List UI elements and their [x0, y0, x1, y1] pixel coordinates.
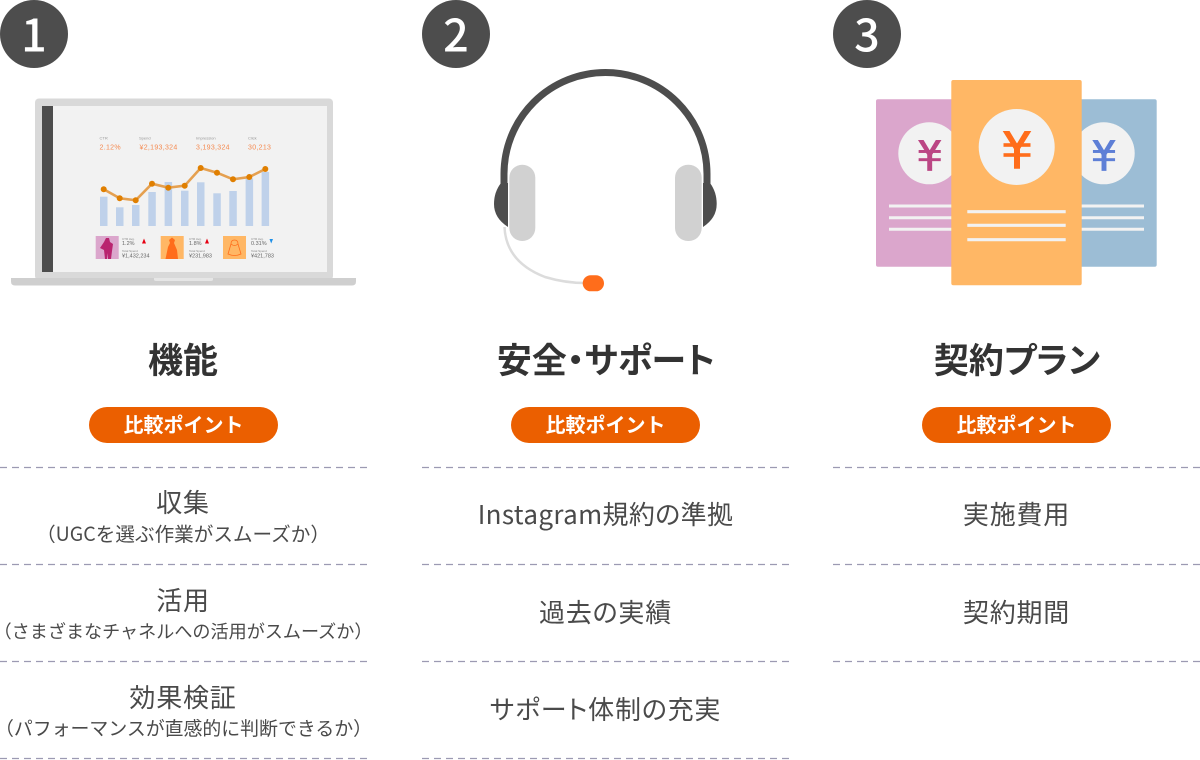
- KPI labels: CTR: [100, 136, 108, 140]
- document: blue: [1070, 99, 1157, 267]
- criteria list: [833, 468, 1200, 662]
- KPI labels: 2.12%: [100, 144, 121, 152]
- product card 2: ¥231,983: [189, 254, 212, 260]
- KPI labels: 30,213: [248, 144, 271, 152]
- pill: 比較ポイント: [922, 407, 1111, 443]
- pill: 比較ポイント: 比較ポイント: [546, 414, 666, 437]
- number badge 3: [833, 0, 901, 68]
- number badge 3: 3: [854, 0, 880, 64]
- number badge 1: [0, 0, 68, 68]
- product card 2: [161, 236, 212, 260]
- KPI labels: Click: [248, 136, 257, 140]
- KPI labels: Spend: [139, 136, 151, 140]
- item: 収集: （UGCを選ぶ作業がスムーズか）: [36, 518, 330, 547]
- product card 2: CTR Avg.: [189, 237, 202, 241]
- icon: laptop dashboard: [11, 98, 356, 286]
- product card 2: 1.8%: [189, 241, 202, 247]
- icon: yen price documents: [876, 80, 1157, 285]
- item: Instagram規約の準拠: Instagram規約の準拠: [478, 495, 733, 532]
- product card 1: CTR Avg.: [122, 237, 135, 241]
- criteria list: [0, 468, 372, 758]
- document: pink: [876, 99, 966, 267]
- heading: 機能: 機能: [148, 342, 218, 381]
- KPI labels: [100, 136, 271, 152]
- item: 活用: [0, 581, 372, 644]
- product card 1: 1.2%: [122, 241, 135, 247]
- item: 過去の実績: 過去の実績: [539, 593, 672, 630]
- criteria list: [422, 468, 789, 758]
- item: 収集: [36, 483, 330, 547]
- KPI labels: ¥2,193,324: [140, 144, 178, 152]
- product card 3: Total Spend: [251, 249, 267, 253]
- item: 効果検証: 効果検証: [129, 678, 237, 715]
- product card 2: Total Spend: [189, 249, 205, 253]
- pill: 比較ポイント: [511, 407, 700, 443]
- bar chart: [100, 172, 269, 226]
- icon: headset: [494, 72, 717, 291]
- column 2: 安全・サポート: [422, 0, 789, 758]
- item: 効果検証: （パフォーマンスが直感的に判断できるか）: [0, 714, 372, 741]
- product card 1: [96, 236, 150, 260]
- product card 3: 0.31%: [251, 241, 267, 247]
- heading: 安全・サポート: 安全・サポート: [497, 342, 715, 381]
- item: サポート体制の充実: サポート体制の充実: [490, 690, 721, 727]
- number badge 1: 1: [21, 0, 47, 64]
- pill: 比較ポイント: 比較ポイント: [124, 414, 244, 437]
- item: 収集: 収集: [156, 483, 210, 520]
- pill: 比較ポイント: 比較ポイント: [956, 414, 1076, 437]
- KPI labels: 3,193,324: [196, 144, 230, 152]
- number badge 2: 2: [443, 0, 469, 64]
- item: 活用: （さまざまなチャネルへの活用がスムーズか）: [0, 618, 372, 644]
- product card 3: ¥421,783: [251, 254, 274, 260]
- item: 効果検証: [0, 678, 372, 741]
- item: 活用: 活用: [156, 581, 210, 618]
- KPI labels: Impression: [196, 136, 216, 140]
- heading: 契約プラン: 契約プラン: [934, 342, 1100, 381]
- column 1: 機能: [0, 0, 372, 758]
- column 3: 契約プラン: [833, 0, 1200, 662]
- product card 3: [223, 236, 274, 260]
- product card 1: Total Spend: [122, 249, 138, 253]
- product card 3: CTR Avg.: [251, 237, 264, 241]
- line chart: [101, 165, 268, 203]
- pill: 比較ポイント: [89, 407, 278, 443]
- item: 契約期間: 契約期間: [963, 593, 1070, 630]
- document: orange: [951, 80, 1082, 285]
- number badge 2: [422, 0, 490, 68]
- item: 実施費用: 実施費用: [963, 495, 1070, 532]
- product card 1: ¥1,432,234: [122, 254, 150, 260]
